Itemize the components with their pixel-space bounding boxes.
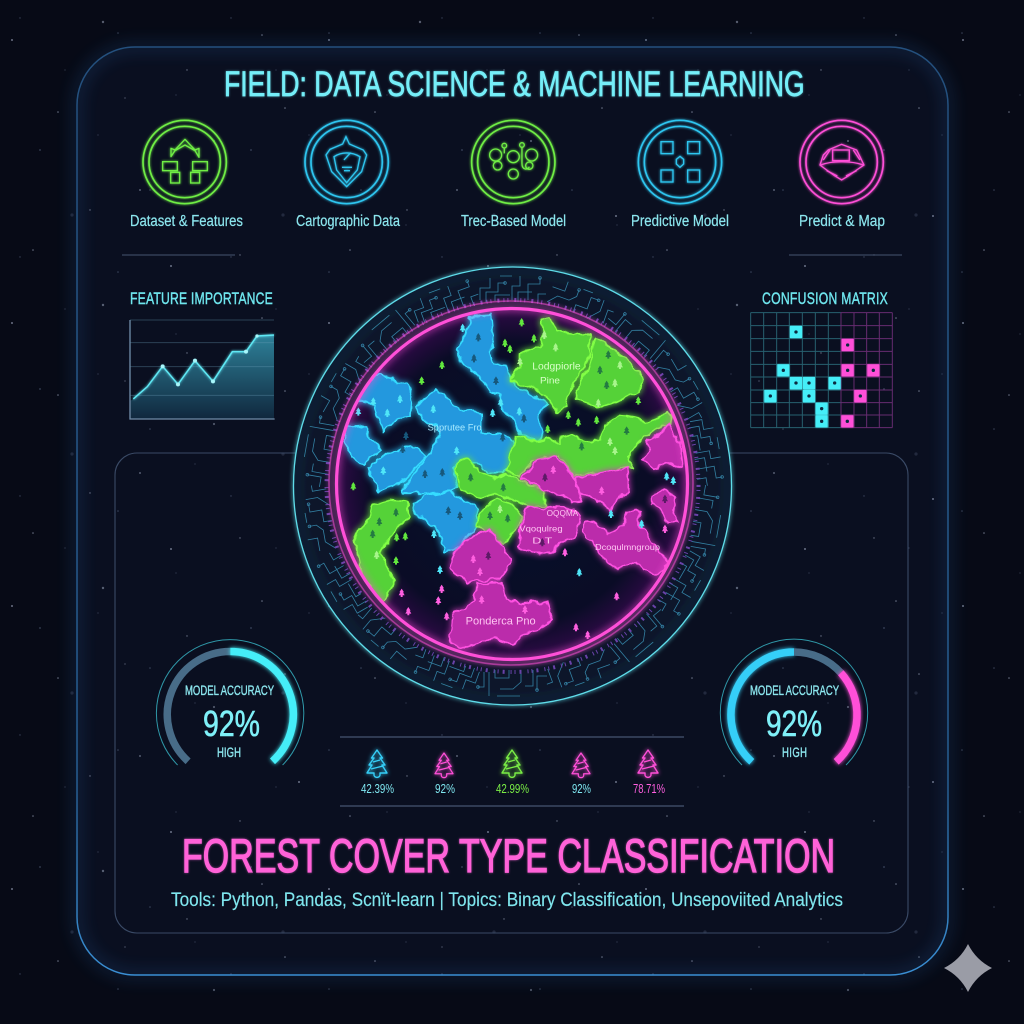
icon: tree-based model bbox=[472, 120, 555, 204]
icon: sparkle watermark bbox=[944, 944, 992, 992]
map region labels: Dcoqulmngroup bbox=[595, 543, 661, 552]
label: predict and map: Predict & Map bbox=[799, 213, 885, 230]
gauge status right: HIGH bbox=[782, 744, 807, 761]
legend item 2: 92% bbox=[435, 781, 455, 796]
main title: FOREST COVER TYPE CLASSIFICATION bbox=[182, 830, 835, 882]
outer ring disc bbox=[294, 267, 732, 705]
heading: confusion matrix: CONFUSION MATRIX bbox=[762, 290, 888, 309]
gauge status left: HIGH bbox=[217, 744, 241, 761]
label: tree-based model: Trec-Based Model bbox=[461, 213, 566, 230]
confusion matrix panel bbox=[751, 290, 892, 428]
subtitle: tools and topics: Tools: Python, Pandas, Scnït-learn | Topics: Binary Classification, Unsepoviited Analytics bbox=[171, 890, 843, 911]
pink map rings bbox=[329, 301, 693, 665]
map regions bbox=[343, 315, 683, 648]
legend item 2 bbox=[435, 753, 455, 796]
map region labels bbox=[428, 361, 661, 627]
region: ponderosa pine (magenta) bbox=[450, 423, 683, 648]
gauge label right: MODEL ACCURACY bbox=[750, 682, 839, 699]
legend item 3: 42.99% bbox=[496, 781, 529, 796]
label: dataset and features: Dataset & Features bbox=[130, 213, 243, 230]
label: predictive model: Predictive Model bbox=[631, 213, 729, 230]
legend item 4 bbox=[572, 753, 591, 796]
outer glowing frame bbox=[77, 47, 948, 975]
map region labels: Lodgpiorle bbox=[532, 361, 581, 372]
legend item 4: 92% bbox=[572, 781, 591, 796]
legend item 3 bbox=[496, 750, 529, 796]
icon: predictive model bbox=[638, 120, 722, 204]
legend item 5: 78.71% bbox=[633, 781, 665, 796]
gauge: model accuracy right bbox=[720, 639, 868, 765]
circuit ring bbox=[299, 276, 725, 696]
map region labels: Ponderca Pno bbox=[466, 615, 536, 627]
map region labels: Spprutee Fro bbox=[428, 423, 482, 433]
divider lines under icons bbox=[122, 254, 902, 256]
region: lodgepole pine (green) bbox=[355, 318, 672, 602]
legend item 1 bbox=[361, 750, 394, 796]
map region labels: D T bbox=[532, 536, 552, 545]
icon: cartographic data bbox=[305, 120, 388, 204]
map tree markers bbox=[350, 318, 676, 639]
map region labels: OQQMA bbox=[547, 509, 579, 518]
matrix grid bbox=[751, 313, 892, 428]
workflow icons row bbox=[130, 120, 885, 230]
label: cartographic data: Cartographic Data bbox=[296, 213, 400, 230]
map region labels: Pine bbox=[540, 375, 560, 385]
line chart bbox=[130, 320, 275, 419]
legend item 5 bbox=[633, 750, 665, 796]
gauge arcs left bbox=[156, 640, 304, 765]
central forest map bbox=[294, 267, 732, 705]
feature importance panel bbox=[130, 290, 275, 419]
gauge value left: 92% bbox=[203, 703, 260, 744]
heading: field: FIELD: DATA SCIENCE & MACHINE LEARNING bbox=[224, 64, 805, 104]
region: spruce fir (blue) bbox=[343, 315, 548, 552]
map disc bbox=[335, 307, 689, 661]
gauge label left: MODEL ACCURACY bbox=[185, 682, 274, 699]
icon: dataset and features bbox=[143, 120, 226, 204]
icon: predict and map bbox=[800, 120, 883, 204]
gauge value right: 92% bbox=[766, 703, 822, 744]
heading: feature importance: FEATURE IMPORTANCE bbox=[130, 290, 273, 309]
tree legend bbox=[340, 737, 684, 806]
map region labels: Vqoqulreg bbox=[519, 523, 563, 533]
legend item 1: 42.39% bbox=[361, 781, 394, 796]
gauge arcs right bbox=[720, 639, 868, 765]
inner panel outline bbox=[115, 453, 908, 933]
gauge: model accuracy left bbox=[156, 640, 304, 765]
